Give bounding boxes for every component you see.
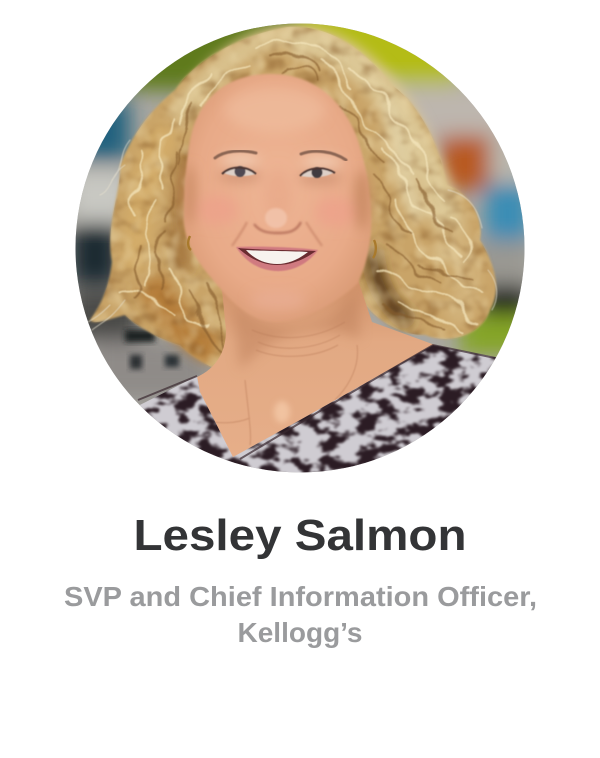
hair xyxy=(85,25,505,380)
portrait photo xyxy=(76,24,524,472)
fine flyaway strands xyxy=(88,140,497,330)
profile card xyxy=(64,24,536,648)
nose xyxy=(232,208,322,246)
job title: SVP and Chief Information Officer, xyxy=(64,581,537,612)
hair texture xyxy=(85,25,505,380)
eyes xyxy=(222,166,335,178)
photo background xyxy=(76,24,524,472)
hair strand details xyxy=(120,41,480,370)
eyebrows xyxy=(215,151,346,160)
neck and chest xyxy=(195,280,435,458)
face xyxy=(184,74,376,322)
name: Lesley Salmon xyxy=(134,511,466,560)
earrings xyxy=(188,236,376,258)
cheek shading xyxy=(184,88,370,310)
blouse xyxy=(138,344,496,472)
company: Kellogg’s xyxy=(238,617,362,648)
smile xyxy=(236,247,318,271)
